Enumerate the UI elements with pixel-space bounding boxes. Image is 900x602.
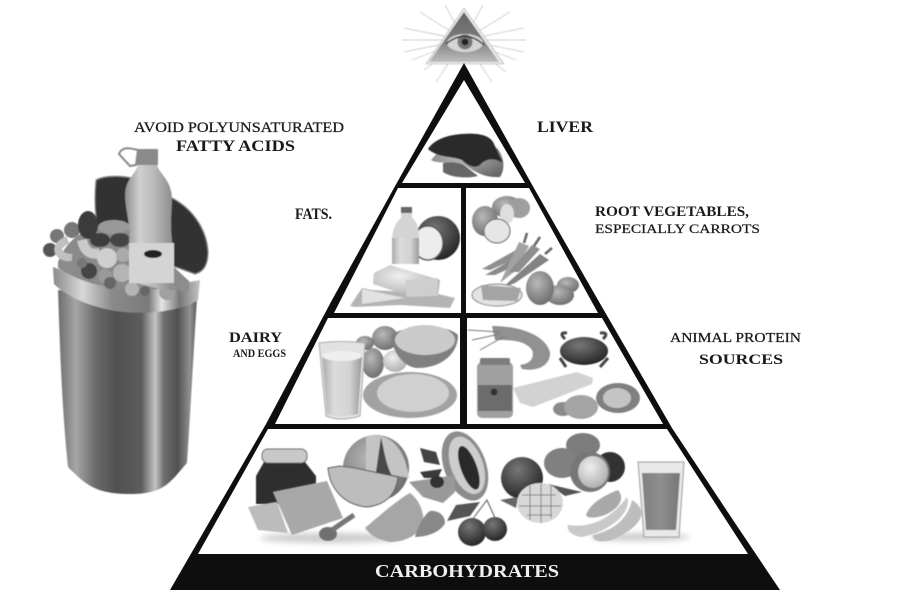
can body bbox=[58, 290, 197, 494]
label: fats: FATS. bbox=[295, 206, 332, 223]
heading: avoid polyunsaturated fatty acids: FATTY ACIDS bbox=[176, 138, 295, 155]
root vegetables illustration bbox=[472, 196, 579, 306]
label: animal protein sources: SOURCES bbox=[699, 352, 783, 368]
chopped plate bbox=[472, 284, 522, 306]
honeycomb bbox=[248, 502, 288, 533]
open lid bbox=[95, 176, 208, 274]
papaya bbox=[433, 425, 497, 507]
oysters bbox=[553, 402, 573, 416]
carrots bbox=[482, 250, 520, 270]
carbohydrates label: CARBOHYDRATES bbox=[375, 561, 559, 581]
animal protein illustration bbox=[468, 326, 640, 419]
plate of grains bbox=[363, 372, 457, 418]
soft shadow bbox=[260, 533, 400, 543]
eye rays bbox=[402, 5, 526, 82]
whole potatoes bbox=[557, 277, 579, 293]
bowl of grains bbox=[391, 327, 458, 368]
milk glass bbox=[319, 342, 365, 419]
honey dipper bbox=[319, 527, 337, 541]
melon wedge bbox=[365, 493, 423, 542]
nuts pile bbox=[43, 211, 190, 300]
coconut bbox=[416, 216, 460, 260]
parsley bbox=[420, 448, 440, 465]
trash can with oils and nuts bbox=[43, 148, 208, 494]
root vegetables tier panel bbox=[466, 188, 598, 313]
dairy and eggs illustration bbox=[319, 325, 458, 419]
label: root vegetables: ROOT VEGETABLES, bbox=[595, 204, 749, 220]
icon: all-seeing eye bbox=[402, 5, 526, 82]
label: dairy and eggs: DAIRY bbox=[229, 330, 282, 346]
eye triangle bbox=[426, 8, 504, 64]
fats illustration bbox=[350, 207, 460, 308]
fats tier panel bbox=[334, 188, 461, 313]
label: animal protein sources: ANIMAL PROTEIN bbox=[670, 330, 801, 345]
oil bottle bbox=[119, 148, 174, 290]
label: root vegetables: ESPECIALLY CARROTS bbox=[595, 221, 760, 236]
heading: avoid polyunsaturated fatty acids bbox=[134, 120, 344, 155]
honey jar bbox=[256, 462, 316, 504]
potatoes bbox=[492, 196, 522, 218]
can rim bbox=[53, 267, 200, 313]
jar bbox=[477, 362, 513, 418]
passion fruit bbox=[501, 457, 543, 499]
pyramid frame bbox=[170, 63, 780, 590]
label: dairy and eggs: AND EGGS bbox=[233, 348, 286, 360]
liver tier panel bbox=[402, 80, 525, 183]
label: dairy and eggs bbox=[229, 330, 286, 360]
crab bbox=[560, 337, 608, 365]
melon bbox=[343, 435, 409, 501]
label: animal protein sources bbox=[670, 330, 801, 368]
leaves under lychee bbox=[548, 484, 582, 496]
eggs bbox=[372, 326, 398, 350]
dairy tier panel bbox=[275, 318, 460, 424]
butter blocks bbox=[350, 288, 455, 308]
mango bbox=[517, 483, 563, 523]
animal protein tier panel bbox=[467, 318, 663, 424]
lychees bbox=[566, 433, 600, 457]
carbohydrates fruit illustration bbox=[248, 425, 690, 546]
juice glass bbox=[638, 462, 684, 537]
bananas bbox=[586, 490, 621, 518]
label: root vegetables bbox=[595, 204, 760, 236]
cherries bbox=[447, 502, 480, 521]
label: liver: LIVER bbox=[537, 119, 594, 136]
carbohydrates tier panel bbox=[198, 429, 748, 554]
liver illustration bbox=[428, 134, 503, 177]
heading: avoid polyunsaturated fatty acids: AVOID POLYUNSATURATED bbox=[134, 120, 344, 136]
oil bottle bbox=[392, 212, 419, 263]
shrimp bbox=[492, 326, 550, 370]
fish fillet bbox=[513, 372, 593, 407]
